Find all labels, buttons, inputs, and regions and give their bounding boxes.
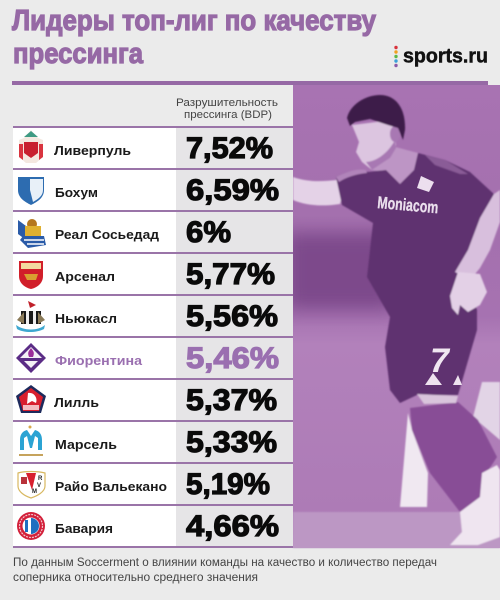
face xyxy=(352,120,396,170)
value: 4,66% xyxy=(186,510,279,543)
shirt xyxy=(336,153,495,403)
name: Марсель xyxy=(55,437,117,452)
title xyxy=(12,5,376,70)
name: Лилль xyxy=(54,395,99,410)
row: Ньюкасл xyxy=(13,295,293,337)
title: прессинга xyxy=(13,38,144,70)
crest: Real Sociedad xyxy=(18,219,46,248)
crest: Rayo Vallecano: R xyxy=(38,476,43,482)
name: Реал Сосьедад xyxy=(55,227,160,242)
neck xyxy=(372,145,418,186)
crest: Lille xyxy=(16,385,46,413)
footnote xyxy=(13,557,437,584)
shirt sponsor: Moniacom xyxy=(377,193,439,217)
thigh xyxy=(410,402,497,512)
row: Бохум xyxy=(13,169,293,211)
row: Райо Вальекано xyxy=(13,463,293,505)
name: Ливерпуль xyxy=(54,143,131,158)
value: 6,59% xyxy=(186,174,279,207)
crest: Bayern xyxy=(17,512,45,540)
value: 7,52% xyxy=(186,132,273,165)
row: Марсель xyxy=(13,421,293,463)
name: Ньюкасл xyxy=(55,311,117,326)
name: Райо Вальекано xyxy=(55,479,167,494)
column header xyxy=(176,97,278,121)
crest: Rayo Vallecano xyxy=(18,472,45,498)
name: Бохум xyxy=(55,185,98,200)
row: Ливерпуль xyxy=(13,127,293,169)
value: 5,56% xyxy=(186,300,278,333)
value: 5,33% xyxy=(186,426,277,459)
player photo xyxy=(285,85,500,548)
kit logo xyxy=(425,373,462,385)
row: Бавария xyxy=(13,505,293,547)
value: 5,37% xyxy=(186,384,277,417)
crest: Liverpool xyxy=(19,130,43,163)
hair xyxy=(347,95,405,140)
waistband xyxy=(417,394,458,404)
column header: Разрушительность xyxy=(176,97,278,109)
footnote: По данным Soccerment о влиянии команды на качество и количество передач xyxy=(13,557,437,569)
footnote: соперника относительно среднего значения xyxy=(13,572,258,584)
goal-post shapes xyxy=(400,413,428,507)
name: Арсенал xyxy=(55,269,115,284)
crest: Fiorentina xyxy=(16,343,46,373)
crest: Arsenal xyxy=(19,261,43,289)
row: Лилль xyxy=(13,379,293,421)
crest: Rayo Vallecano: M xyxy=(32,489,37,495)
right arm xyxy=(455,190,500,280)
left arm xyxy=(293,177,342,205)
title rule xyxy=(12,81,488,85)
row: Реал Сосьедад xyxy=(13,211,293,253)
shirt number: 7 xyxy=(430,342,451,380)
name: Бавария xyxy=(55,521,113,536)
value: 5,19% xyxy=(186,468,270,501)
value: 5,46% xyxy=(186,342,279,375)
socks and boots xyxy=(450,465,500,545)
crest: Newcastle xyxy=(16,301,45,332)
shirt crest xyxy=(417,176,434,192)
title: Лидеры топ-лиг по качеству xyxy=(12,5,376,37)
crest: Rayo Vallecano: V xyxy=(37,483,41,489)
crest: Bochum xyxy=(18,177,44,205)
column header: прессинга (BDP) xyxy=(184,109,272,121)
value: 5,77% xyxy=(186,258,275,291)
row: Арсенал xyxy=(13,253,293,295)
ear xyxy=(390,126,400,142)
row: Фиорентина xyxy=(13,337,293,379)
crest: Marseille xyxy=(19,426,43,456)
value: 6% xyxy=(186,216,231,249)
hand xyxy=(450,272,487,315)
logo: sports.ru: sports.ru xyxy=(403,44,488,68)
name: Фиорентина xyxy=(55,353,143,368)
